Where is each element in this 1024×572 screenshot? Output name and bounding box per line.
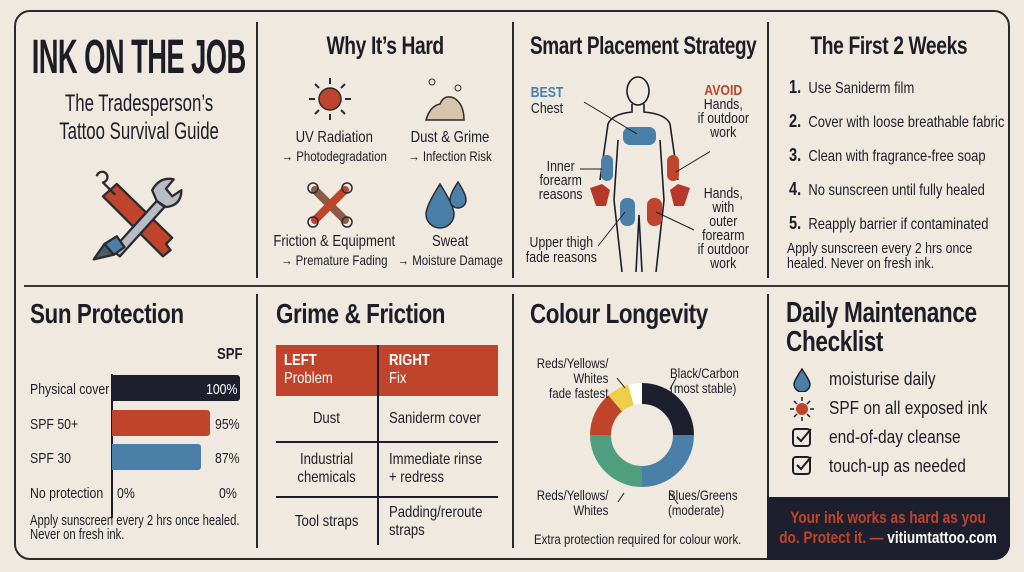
text: sweat: → Moisture Damage bbox=[398, 252, 503, 268]
heading: Sun Protection bbox=[30, 298, 184, 329]
heading: Checklist bbox=[786, 326, 883, 358]
panel: colour longevity: Black/Carbon bbox=[670, 365, 739, 381]
panel: colour longevity: (moderate) bbox=[668, 502, 724, 518]
label: hands outer forearm: forearm bbox=[702, 227, 744, 244]
text: friction bbox=[273, 233, 396, 268]
icon: water drops bbox=[425, 180, 467, 229]
table: Immediate rinse bbox=[389, 451, 482, 468]
text: friction: → Premature Fading bbox=[281, 252, 388, 268]
label: avoid: if outdoor bbox=[698, 110, 749, 127]
heading: Smart Placement Strategy bbox=[530, 32, 756, 60]
checklist: touch-up as needed bbox=[829, 456, 966, 476]
panel: grime & friction bbox=[276, 298, 498, 545]
footer text: do. Protect it. — vitiumtattoo.com bbox=[780, 528, 997, 547]
panel: colour longevity: Whites bbox=[573, 502, 608, 518]
table: RIGHT bbox=[389, 352, 430, 369]
heading: The First 2 Weeks bbox=[811, 32, 967, 60]
bar chart: No protection bbox=[30, 485, 103, 502]
text: UV: UV Radiation bbox=[296, 129, 373, 146]
subtitle: The Tradesperson’s bbox=[65, 90, 213, 117]
donut labels: Whites bbox=[573, 370, 608, 386]
steps list bbox=[789, 77, 1004, 233]
label: hands outer forearm bbox=[698, 185, 749, 272]
bar chart: 0% bbox=[117, 485, 135, 502]
checklist: SPF on all exposed ink bbox=[829, 398, 987, 418]
table: Industrial bbox=[300, 451, 353, 468]
steps list: 5. Reapply barrier if contaminated bbox=[789, 213, 988, 233]
panel: colour longevity bbox=[530, 298, 741, 547]
icon: sun bbox=[309, 78, 351, 120]
checklist: end-of-day cleanse bbox=[829, 427, 961, 447]
table: straps bbox=[389, 522, 425, 539]
note bbox=[30, 512, 240, 543]
text: UV bbox=[282, 129, 387, 164]
label: inner forearm bbox=[539, 158, 583, 203]
donut labels bbox=[536, 355, 608, 401]
note: Never on fresh ink. bbox=[30, 526, 124, 543]
bar chart: 0% bbox=[219, 485, 237, 502]
label: avoid bbox=[698, 82, 749, 141]
panel: daily maintenance bbox=[786, 297, 988, 476]
panel: colour longevity: Reds/Yellows/ bbox=[536, 487, 608, 503]
text: friction: Friction & Equipment bbox=[273, 233, 395, 250]
bar chart: 95% bbox=[215, 416, 240, 433]
text: sweat: Sweat bbox=[432, 233, 468, 250]
label: avoid: work bbox=[710, 124, 736, 141]
label: inner forearm: reasons bbox=[539, 186, 583, 203]
label: hands outer forearm: if outdoor bbox=[698, 241, 749, 258]
steps list: 3. Clean with fragrance-free soap bbox=[789, 145, 986, 165]
table: LEFT bbox=[284, 352, 317, 369]
icon: dust bbox=[425, 78, 465, 121]
text: dust bbox=[408, 129, 492, 164]
heading: Daily Maintenance bbox=[786, 297, 977, 329]
note: Apply sunscreen every 2 hrs once bbox=[787, 240, 972, 257]
panel: colour longevity: (most stable) bbox=[670, 380, 736, 396]
table: Dust bbox=[313, 410, 340, 427]
label: hands outer forearm: Hands, bbox=[704, 185, 743, 202]
text: dust: Dust & Grime bbox=[411, 129, 489, 146]
steps list: 1. Use Saniderm film bbox=[789, 77, 914, 97]
label: upper thigh: Upper thigh bbox=[530, 234, 593, 251]
title: INK ON THE JOB bbox=[32, 31, 246, 84]
callout: footer bbox=[767, 497, 1010, 560]
bar chart: 87% bbox=[215, 450, 240, 467]
label: best: BEST bbox=[531, 84, 563, 101]
footer text: Your ink works as hard as you bbox=[791, 508, 986, 527]
panel: why it's hard bbox=[273, 32, 503, 268]
checklist bbox=[789, 366, 1004, 491]
table bbox=[276, 345, 498, 545]
table: Saniderm cover bbox=[389, 410, 481, 427]
table: + redress bbox=[389, 469, 444, 486]
bar chart: SPF bbox=[217, 346, 243, 363]
table: chemicals bbox=[297, 469, 356, 486]
panel: title bbox=[32, 31, 246, 260]
icon: tattoo pen and wrench bbox=[92, 170, 183, 260]
bar chart: Physical cover bbox=[30, 381, 109, 398]
note: healed. Never on fresh ink. bbox=[787, 255, 934, 272]
label: avoid: Hands, bbox=[704, 96, 743, 113]
checklist: moisturise daily bbox=[829, 369, 936, 389]
heading: Why It’s Hard bbox=[326, 32, 444, 60]
heading: Grime & Friction bbox=[276, 298, 445, 329]
heading bbox=[786, 297, 977, 358]
label: inner forearm: Inner bbox=[547, 158, 575, 175]
label: upper thigh bbox=[526, 234, 597, 266]
panel: first 2 weeks bbox=[787, 32, 1004, 272]
subtitle bbox=[59, 90, 219, 145]
text: UV: → Photodegradation bbox=[282, 148, 387, 164]
label: hands outer forearm: work bbox=[710, 255, 736, 272]
label: hands outer forearm: with bbox=[712, 199, 734, 216]
panel: colour longevity: Blues/Greens bbox=[668, 487, 738, 503]
bar chart: 100% bbox=[206, 381, 237, 398]
steps list: 4. No sunscreen until fully healed bbox=[789, 179, 985, 199]
subtitle: Tattoo Survival Guide bbox=[59, 118, 219, 145]
table: Problem bbox=[284, 370, 333, 387]
note: Apply sunscreen every 2 hrs once healed. bbox=[30, 512, 240, 529]
text: dust: → Infection Risk bbox=[408, 148, 492, 164]
label: hands outer forearm: outer bbox=[709, 213, 737, 230]
donut labels: fade fastest bbox=[549, 385, 608, 401]
label: upper thigh: fade reasons bbox=[526, 249, 597, 266]
table: Padding/reroute bbox=[389, 504, 482, 521]
bar chart: SPF 30 bbox=[30, 450, 71, 467]
bar chart bbox=[30, 346, 243, 518]
table: Fix bbox=[389, 370, 406, 387]
panel: smart placement bbox=[526, 32, 757, 272]
label: best: Chest bbox=[531, 100, 563, 117]
donut labels: Reds/Yellows/ bbox=[536, 355, 608, 371]
label: best bbox=[531, 84, 564, 117]
note bbox=[787, 240, 972, 272]
table: Tool straps bbox=[295, 513, 358, 530]
icon: crossed wrenches bbox=[307, 182, 353, 228]
text: sweat bbox=[398, 233, 503, 268]
steps list: 2. Cover with loose breathable fabric bbox=[789, 111, 1004, 131]
panel: sun protection bbox=[30, 298, 243, 543]
body diagram bbox=[580, 76, 710, 272]
footer text bbox=[707, 508, 1024, 548]
bar chart: SPF 50+ bbox=[30, 416, 78, 433]
donut chart bbox=[590, 383, 694, 487]
heading: Colour Longevity bbox=[530, 298, 708, 329]
note: Extra protection required for colour work. bbox=[534, 531, 741, 547]
label: inner forearm: forearm bbox=[540, 172, 582, 189]
label: avoid: AVOID bbox=[704, 82, 742, 99]
